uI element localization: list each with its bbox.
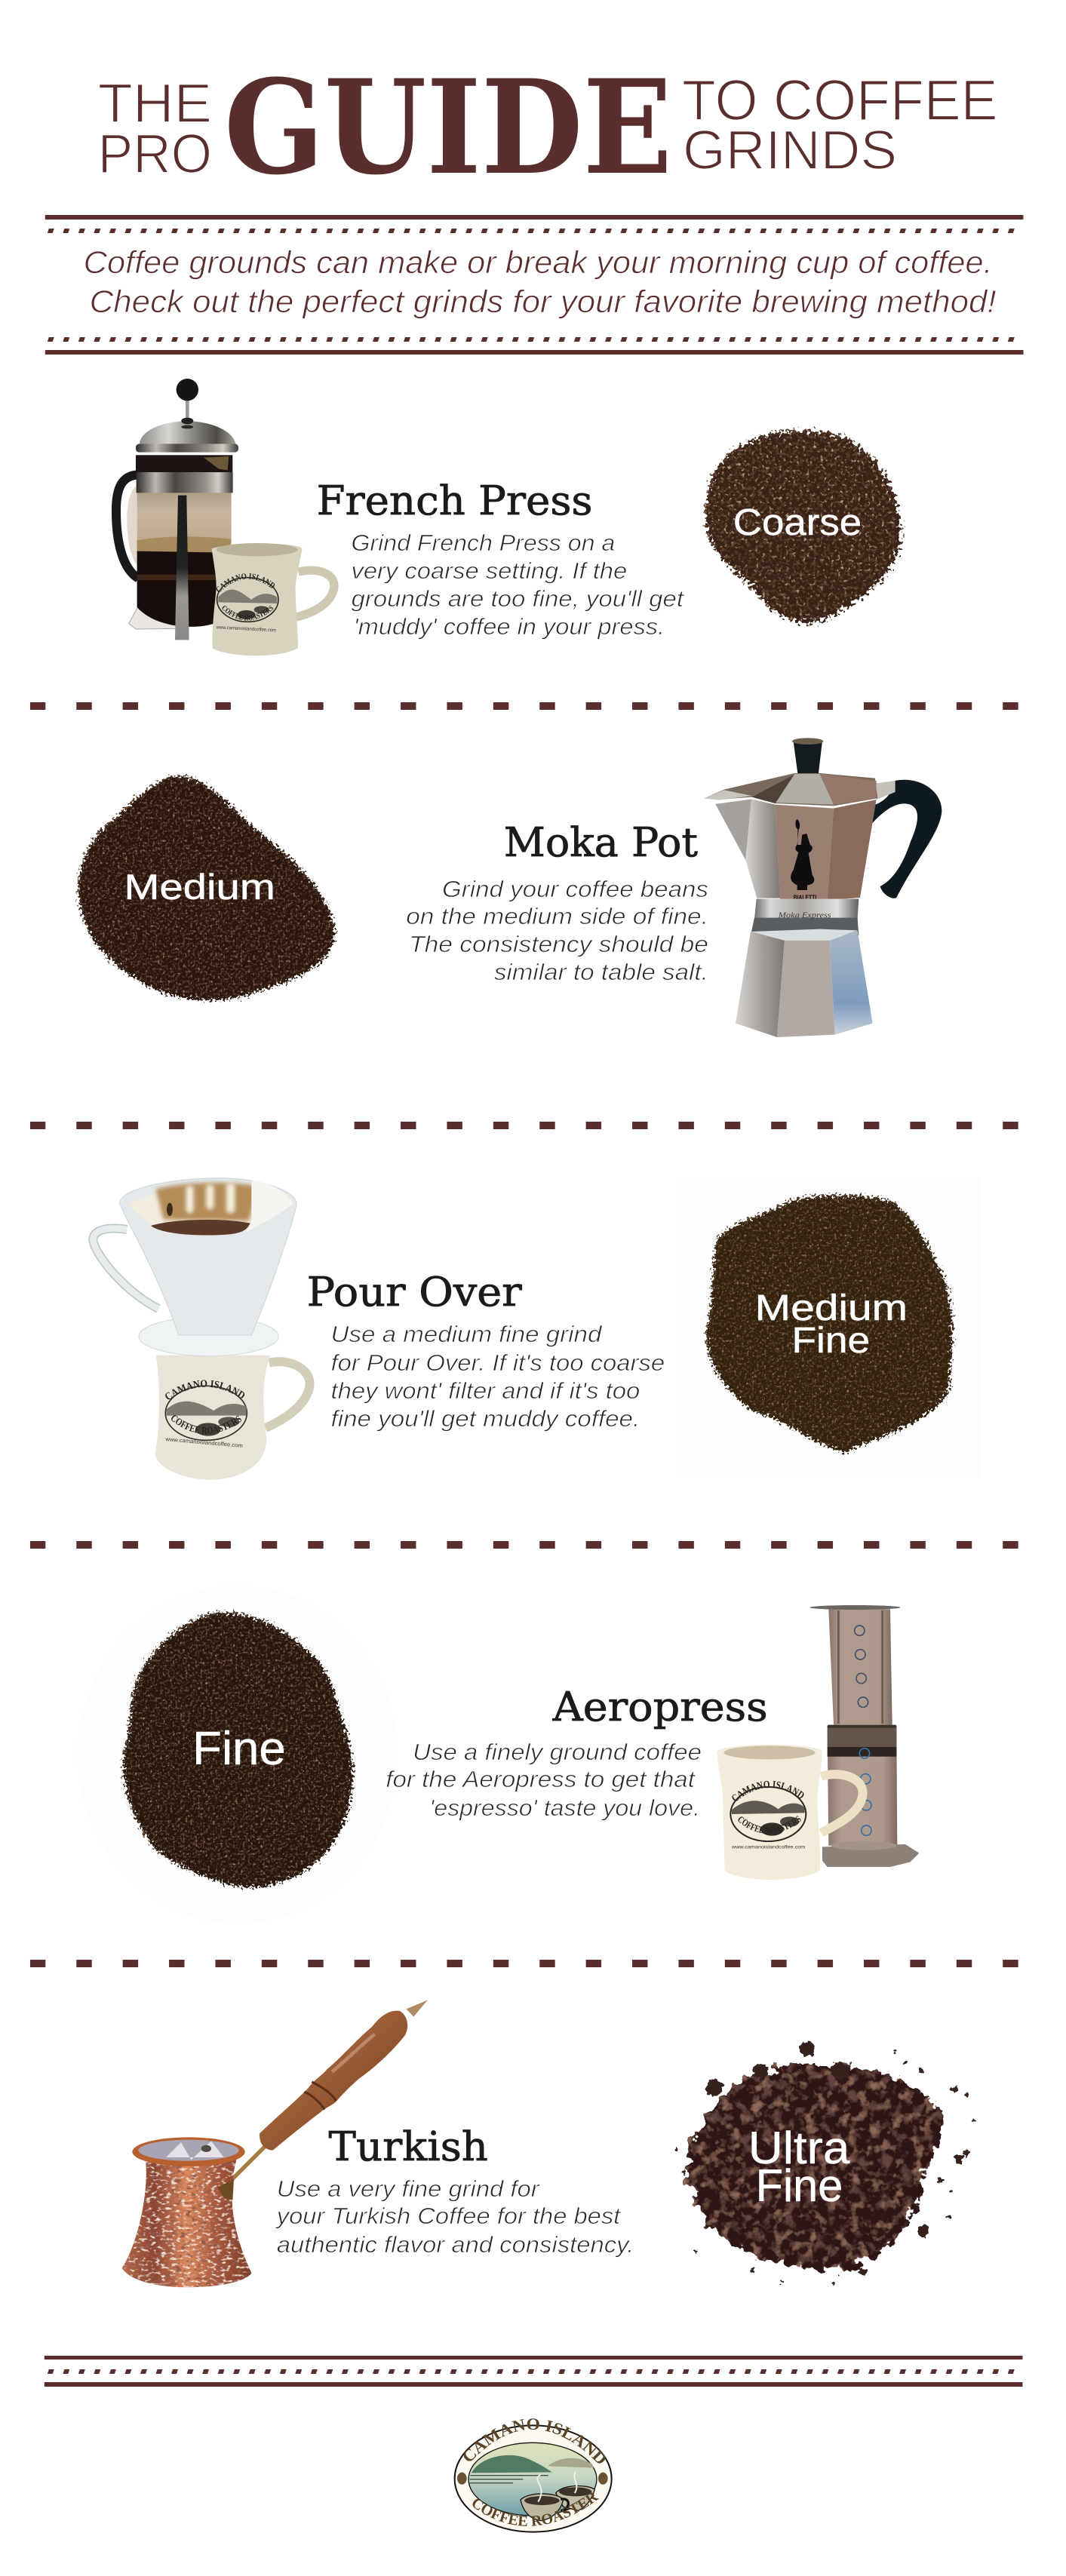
- description: Aeropress: [386, 1739, 702, 1821]
- icon: pour over dripper on mug: [88, 1177, 314, 1480]
- heading: Aeropress: Aeropress: [552, 1684, 768, 1730]
- description: Turkish: authentic flavor and consistency.: [277, 2231, 634, 2258]
- icon: french press with mug: COFFEE ROASTERS: [222, 605, 273, 620]
- icon: aeropress with mug: www.camanoislandcoffee.com: [731, 1845, 806, 1850]
- title: [98, 52, 998, 204]
- description: French Press: 'muddy' coffee in your press.: [353, 613, 665, 640]
- panel: French Press: [112, 379, 905, 656]
- logo: Camano Island Coffee Roasters: [454, 2418, 613, 2533]
- description: French Press: grounds are too fine, you'll get: [351, 585, 684, 612]
- description: Turkish: [275, 2175, 634, 2258]
- icon: moka pot: [704, 738, 942, 1037]
- heading: Moka Pot: Moka Pot: [504, 820, 698, 866]
- icon: pour over dripper on mug: CAMANO ISLAND: [165, 1380, 244, 1400]
- panel: Turkish: [122, 2000, 975, 2287]
- medium grounds: Medium: [124, 867, 275, 907]
- title: GRINDS: GRINDS: [683, 120, 897, 181]
- intro text: Coffee grounds can make or break your morning cup of coffee.: [84, 244, 993, 280]
- description: Moka Pot: [406, 876, 708, 985]
- heading: Pour Over: Pour Over: [307, 1270, 522, 1316]
- description: Pour Over: they wont' filter and if it's too: [331, 1377, 640, 1404]
- medium fine grounds: Fine: [792, 1321, 870, 1361]
- medium grounds: [78, 775, 335, 1000]
- logo: Camano Island Coffee Roasters: CAMANO ISLAND: [463, 2418, 605, 2464]
- description: French Press: Grind French Press on a: [351, 530, 615, 556]
- description: French Press: very coarse setting. If the: [351, 557, 627, 584]
- description: Aeropress: 'espresso' taste you love.: [429, 1795, 700, 1821]
- icon: moka pot: Moka Express: [777, 912, 831, 920]
- intro text: [84, 244, 997, 319]
- description: Turkish: your Turkish Coffee for the best: [275, 2203, 622, 2229]
- medium fine grounds: [677, 1177, 982, 1478]
- fine grounds: [78, 1586, 398, 1924]
- icon: pour over dripper on mug: www.camanoislandcoffee.com: [164, 1435, 243, 1449]
- description: Pour Over: Use a medium fine grind: [331, 1321, 603, 1347]
- description: Moka Pot: Grind your coffee beans: [442, 876, 708, 902]
- title: PRO: PRO: [98, 124, 212, 185]
- heading: Turkish: Turkish: [329, 2124, 488, 2170]
- title: GUIDE: GUIDE: [224, 52, 672, 204]
- coarse grounds: [706, 431, 901, 622]
- description: Pour Over: for Pour Over. If it's too coarse: [331, 1349, 665, 1376]
- description: Turkish: Use a very fine grind for: [277, 2175, 540, 2202]
- icon: french press with mug: [112, 379, 339, 656]
- coarse grounds: Coarse: [733, 502, 862, 543]
- ultra fine grounds: [675, 2041, 975, 2285]
- icon: aeropress with mug: CAMANO ISLAND: [732, 1780, 804, 1801]
- description: Pour Over: [331, 1321, 665, 1432]
- description: Aeropress: for the Aeropress to get that: [386, 1766, 696, 1792]
- ultra fine grounds: Fine: [756, 2160, 843, 2211]
- description: Pour Over: fine you'll get muddy coffee.: [331, 1405, 640, 1432]
- icon: turkish coffee pot: [122, 2000, 428, 2287]
- icon: pour over dripper on mug: COFFEE ROASTERS: [171, 1415, 241, 1434]
- description: Moka Pot: on the medium side of fine.: [406, 903, 708, 929]
- panel: Pour Over: [88, 1177, 957, 1480]
- icon: moka pot: BIALETTI: [794, 893, 816, 901]
- medium fine grounds: Medium: [755, 1288, 908, 1328]
- heading: French Press: French Press: [317, 478, 592, 524]
- icon: french press with mug: www.camanoislandcoffee.com: [216, 625, 276, 633]
- description: French Press: [351, 530, 684, 640]
- ultra fine grounds: Ultra: [748, 2123, 850, 2173]
- panel: Aeropress: [119, 1605, 919, 1890]
- panel: Moka Pot: [78, 738, 942, 1037]
- description: Moka Pot: The consistency should be: [409, 931, 708, 957]
- intro text: Check out the perfect grinds for your favorite brewing method!: [90, 284, 997, 319]
- icon: aeropress with mug: [717, 1605, 919, 1880]
- icon: french press with mug: CAMANO ISLAND: [216, 573, 275, 592]
- fine grounds: Fine: [192, 1723, 286, 1775]
- title: THE: THE: [98, 73, 212, 134]
- title: TO COFFEE: TO COFFEE: [682, 69, 998, 133]
- description: Moka Pot: similar to table salt.: [494, 959, 708, 985]
- description: Aeropress: Use a finely ground coffee: [413, 1739, 702, 1765]
- icon: aeropress with mug: COFFEE ROASTERS: [738, 1816, 801, 1834]
- logo: Camano Island Coffee Roasters: COFFEE ROASTERS: [472, 2492, 599, 2526]
